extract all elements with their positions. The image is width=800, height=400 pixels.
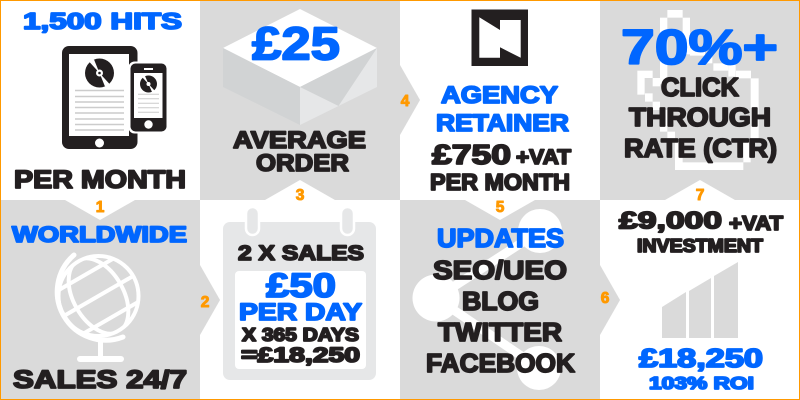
label: click through rate: CLICK bbox=[661, 72, 739, 102]
panel: agency retainer bbox=[430, 10, 571, 195]
arrow: step 5 bbox=[465, 199, 535, 220]
arrow: step 3 bbox=[265, 180, 335, 204]
heading: worldwide: WORLDWIDE bbox=[12, 222, 187, 247]
arrow: step 4: 4 bbox=[401, 93, 410, 110]
list: channels: TWITTER bbox=[438, 317, 562, 347]
panel: worldwide bbox=[12, 222, 187, 394]
calculation: x 365 days = £18,250: X 365 DAYS bbox=[242, 325, 359, 345]
calculation: x 365 days = £18,250: =£18,250 bbox=[241, 344, 360, 367]
price: £9,000 + VAT: +VAT bbox=[729, 213, 783, 235]
arrow: step 1: 1 bbox=[96, 199, 105, 216]
label: sales 24/7: SALES 24/7 bbox=[13, 366, 187, 394]
label: per month: PER MONTH bbox=[14, 166, 186, 194]
label: 103% ROI: 103% ROI bbox=[649, 373, 754, 393]
icon: calendar bbox=[223, 207, 376, 380]
label: click through rate: RATE (CTR) bbox=[624, 133, 777, 163]
value: £50 per day: PER DAY bbox=[239, 299, 362, 326]
arrow: step 2 bbox=[200, 265, 220, 335]
panel: click through rate bbox=[621, 10, 778, 170]
arrow: step 6: 6 bbox=[601, 290, 610, 307]
arrow: step 4 bbox=[400, 65, 420, 135]
list: channels: SEO/UEO bbox=[433, 255, 567, 285]
arrow: step 5: 5 bbox=[496, 199, 505, 216]
icon: box bbox=[223, 9, 377, 125]
arrow: step 7: 7 bbox=[696, 187, 704, 204]
value: £50 per day: £50 bbox=[266, 267, 336, 305]
panel: investment and ROI bbox=[619, 208, 783, 393]
panel: average order bbox=[223, 9, 377, 177]
price: £9,000 + VAT bbox=[619, 208, 783, 235]
value: 70%+: 70%+ bbox=[621, 21, 778, 75]
arrow: step 2: 2 bbox=[201, 294, 209, 311]
panel: 1,500 hits per month bbox=[14, 8, 186, 194]
price: £750 + VAT per month: +VAT bbox=[516, 146, 571, 169]
label: average order: AVERAGE bbox=[233, 127, 366, 154]
icon: tablet and phone bbox=[62, 46, 168, 149]
value: £25: £25 bbox=[252, 18, 340, 70]
panel: 2x sales calendar bbox=[223, 207, 376, 380]
list: channels: BLOG bbox=[462, 286, 539, 316]
price: £9,000 + VAT: £9,000 bbox=[619, 208, 722, 234]
icon: N logo bbox=[472, 10, 528, 66]
icon: share network bbox=[412, 209, 562, 390]
label: investment: INVESTMENT bbox=[637, 236, 763, 256]
arrow: step 6 bbox=[600, 265, 620, 335]
label: click through rate: THROUGH bbox=[629, 102, 771, 132]
calculation: x 365 days = £18,250 bbox=[241, 325, 360, 367]
price: £750 + VAT per month bbox=[430, 139, 571, 195]
arrow: step 1 bbox=[65, 199, 135, 220]
label: click through rate bbox=[624, 72, 777, 163]
list: channels: FACEBOOK bbox=[426, 348, 575, 378]
icon: pixel cursor hand bbox=[637, 10, 759, 170]
heading: agency retainer: RETAINER bbox=[436, 110, 569, 137]
heading: updates: UPDATES bbox=[437, 223, 564, 253]
heading: agency retainer bbox=[436, 82, 569, 137]
arrow: step 7 bbox=[665, 180, 735, 204]
icon: globe bbox=[54, 252, 140, 362]
arrow: step 3: 3 bbox=[296, 187, 305, 204]
chart: rising bars bbox=[662, 262, 738, 338]
list: channels bbox=[426, 255, 575, 378]
value: £18,250: £18,250 bbox=[639, 345, 763, 373]
label: average order bbox=[233, 127, 366, 177]
panel: updates bbox=[412, 209, 575, 390]
heading: agency retainer: AGENCY bbox=[441, 82, 558, 109]
heading: 1,500 hits: 1,500 HITS bbox=[23, 8, 182, 34]
label: average order: ORDER bbox=[256, 150, 349, 177]
price: £750 + VAT per month: £750 bbox=[432, 139, 511, 170]
value: £50 per day bbox=[239, 267, 362, 326]
price: £750 + VAT per month: PER MONTH bbox=[430, 169, 570, 195]
label: 2 x sales: 2 X SALES bbox=[238, 241, 364, 265]
